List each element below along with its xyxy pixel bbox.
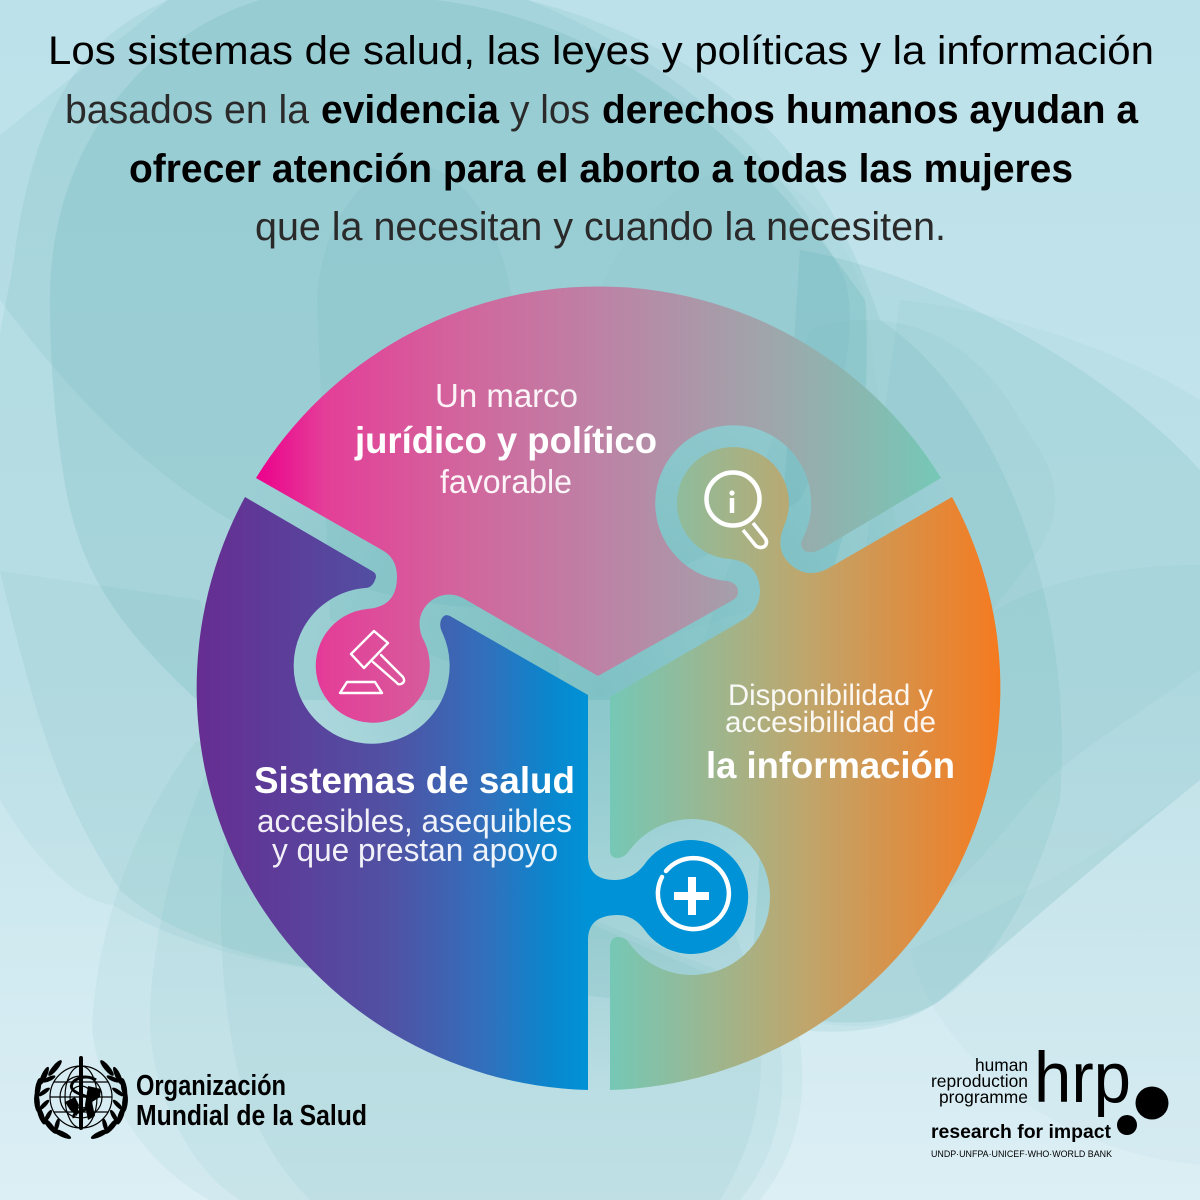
icon: medical cross in circle [658, 858, 729, 929]
text: organization name: Organización [136, 1070, 286, 1102]
text: legal framework: favorable [440, 463, 572, 500]
title: que la necesitan y cuando la necesiten. [255, 205, 946, 249]
title: basados en la [65, 88, 310, 132]
text: legal framework: jurídico y político [354, 420, 657, 461]
text: health systems [254, 760, 575, 868]
panel: legal and policy framework piece [256, 286, 941, 723]
title [48, 29, 1154, 249]
text: health systems: Sistemas de salud [254, 760, 575, 801]
text: programme name: programme [939, 1087, 1028, 1107]
icon: gavel [340, 631, 404, 693]
icon: right laurel [90, 1059, 129, 1141]
text: programme name: human [975, 1055, 1028, 1075]
logo: HRP [931, 1039, 1168, 1160]
icon: left laurel [33, 1059, 72, 1141]
panel: health systems piece [197, 497, 748, 1090]
icon: magnifier with information symbol [706, 472, 766, 548]
text: information: Disponibilidad y [728, 679, 933, 712]
text: organization name: Mundial de la Salud [136, 1100, 367, 1132]
text: information: accesibilidad de [725, 706, 936, 739]
title: y los [510, 88, 590, 132]
text: hrp wordmark: hrp [1034, 1039, 1131, 1118]
title: ofrecer atención para el aborto a todas las mujeres [129, 147, 1073, 191]
text: programme name [931, 1055, 1028, 1107]
title: Los sistemas de salud, las leyes y políticas y la información [48, 29, 1154, 73]
puzzle circle diagram [197, 286, 1000, 1090]
logo: World Health Organization [33, 1058, 367, 1141]
title: derechos humanos ayudan a [602, 88, 1139, 132]
text: information [706, 679, 955, 786]
text: programme name: reproduction [931, 1071, 1028, 1091]
panel: information piece [610, 447, 1000, 1090]
text: information: la información [706, 745, 955, 786]
icon: two dots [1117, 1086, 1168, 1135]
text: legal framework [354, 377, 657, 500]
text: partners: UNDP·UNFPA·UNICEF·WHO·WORLD BANK [931, 1149, 1113, 1160]
title: evidencia [321, 88, 500, 132]
icon: WHO emblem [33, 1058, 129, 1141]
text: health systems: accesibles, asequibles [257, 803, 572, 839]
text: organization name [136, 1070, 367, 1132]
text: legal framework: Un marco [435, 377, 578, 414]
text: health systems: y que prestan apoyo [272, 832, 558, 868]
text: research for impact: research for impact [931, 1122, 1112, 1143]
